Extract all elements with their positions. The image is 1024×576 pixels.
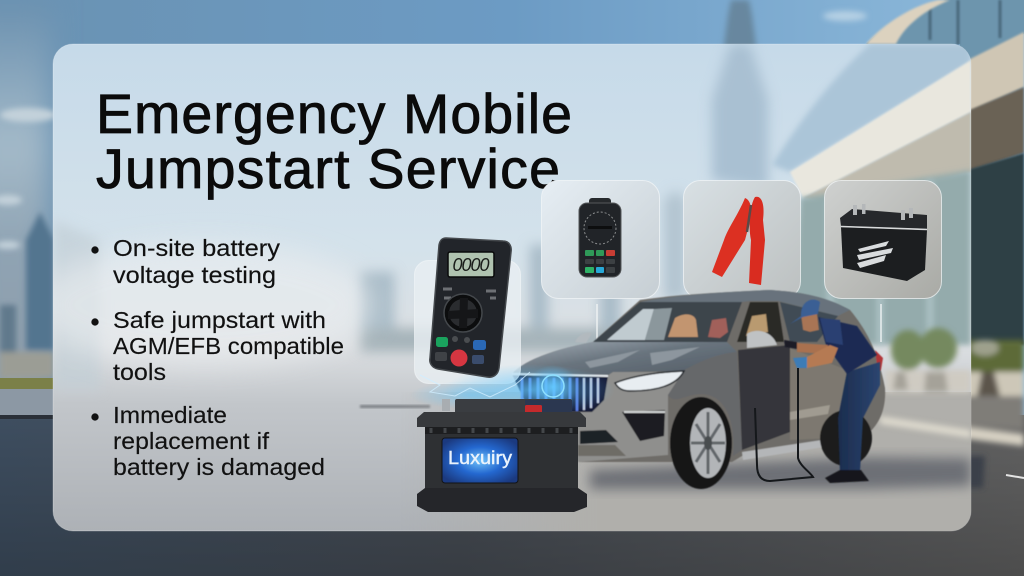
card: jumper clamp (684, 180, 800, 298)
car battery (417, 399, 587, 512)
door panels (738, 345, 790, 450)
connector lines (597, 304, 881, 342)
bullet: voltage testing: On-site battery (113, 235, 280, 261)
bullet: safe jumpstart: AGM/EFB compatible (113, 333, 344, 359)
bullet: safe jumpstart (91, 307, 344, 385)
bullet: immediate replacement: battery is damaged (113, 454, 325, 480)
title: Emergency Mobile (96, 83, 572, 145)
bullet: safe jumpstart: tools (113, 359, 166, 385)
gloves (784, 340, 807, 368)
battery label: Luxuiry (448, 447, 513, 468)
title (96, 83, 572, 200)
meter buttons (435, 336, 486, 366)
torso (818, 317, 877, 374)
bumper vents (622, 410, 665, 441)
bullet: voltage testing: voltage testing (113, 262, 276, 288)
frosted ground on the right (400, 392, 971, 531)
shoes (825, 470, 869, 483)
battery label (442, 438, 518, 483)
roof (640, 290, 850, 316)
frosted glass panel (35, 44, 971, 531)
bullet: voltage testing (91, 235, 280, 288)
front wheel (670, 397, 732, 489)
arm upper (797, 343, 828, 354)
frosted building inside the panel (772, 44, 971, 345)
grille (512, 374, 608, 412)
mechanic (784, 300, 880, 483)
meter dial (444, 294, 482, 332)
head (801, 313, 819, 332)
frosted plants and planters (885, 328, 971, 393)
title: Jumpstart Service (96, 138, 560, 200)
side sill (742, 438, 836, 460)
cap (790, 300, 820, 324)
rear tail (875, 350, 883, 372)
jumper cable (755, 368, 813, 481)
headlight (615, 371, 684, 391)
curved building on the right (866, 0, 1024, 345)
arm lower (807, 345, 838, 368)
side mirror (747, 331, 777, 348)
bullet: immediate replacement (91, 402, 325, 480)
large multimeter (430, 238, 511, 377)
front fender (668, 352, 742, 456)
card: multimeter (542, 180, 660, 298)
bullet: immediate replacement: replacement if (113, 428, 269, 454)
card: battery icon (824, 180, 942, 298)
rear wheel (820, 410, 872, 466)
car body (512, 290, 885, 462)
hood (512, 342, 737, 376)
bullet: immediate replacement: Immediate (113, 402, 227, 428)
side window with seat (737, 302, 784, 342)
bullet: safe jumpstart: Safe jumpstart with (113, 307, 326, 333)
meter display: 0000 (452, 255, 490, 275)
bullet list (91, 235, 344, 480)
electric glow (410, 364, 615, 416)
suv car (512, 290, 885, 489)
soft fog and city inside the panel (53, 44, 768, 390)
rear side window (780, 302, 838, 342)
windshield (593, 302, 742, 342)
legs (838, 362, 880, 472)
left wing mirror (575, 332, 592, 343)
front bumper (574, 372, 683, 462)
front multimeter card (414, 260, 520, 384)
